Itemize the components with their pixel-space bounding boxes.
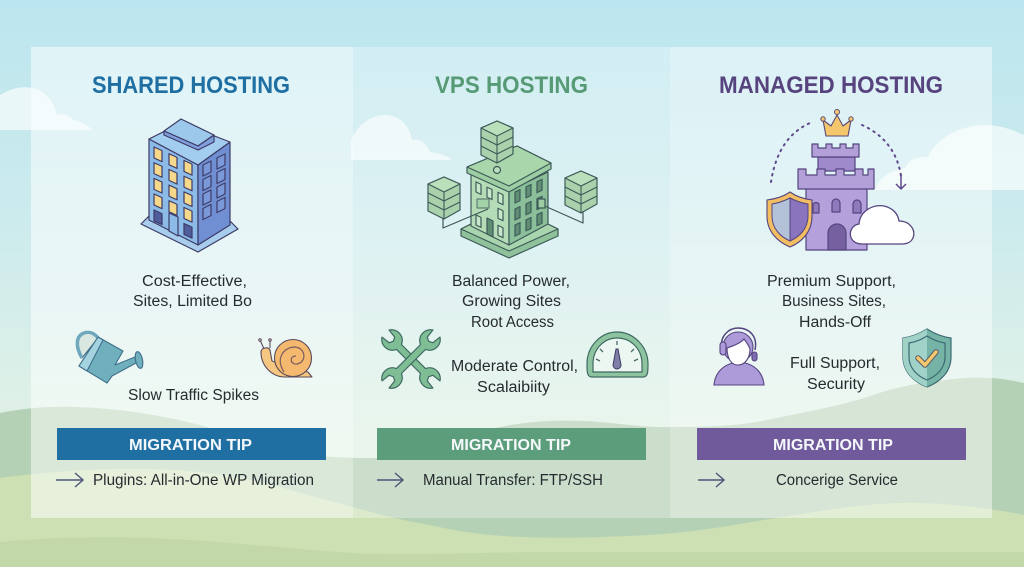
text: VPS tip: Manual Transfer: FTP/SSH <box>423 472 603 489</box>
text: shared summary: Sites, Limited Bo <box>133 293 252 310</box>
icon: apartment building <box>141 119 238 252</box>
text: shared summary <box>133 273 252 310</box>
panel: shared hosting <box>31 47 353 518</box>
arrow: shared tip <box>56 473 83 487</box>
text: managed summary <box>767 273 896 331</box>
icon: security shield <box>903 329 951 387</box>
background hills <box>0 378 1024 567</box>
arrow: VPS tip <box>377 473 403 487</box>
banner: managed migration tip <box>697 428 966 460</box>
banner: shared migration tip <box>57 428 326 460</box>
icon: speed gauge <box>587 332 648 377</box>
panel: VPS hosting <box>353 47 670 518</box>
icon: support agent <box>714 328 764 385</box>
text: VPS summary: Balanced Power, <box>452 273 570 290</box>
heading: shared hosting: SHARED HOSTING <box>92 72 290 99</box>
banner: shared migration tip: MIGRATION TIP <box>129 437 252 454</box>
text: shared tip: Plugins: All-in-One WP Migration <box>93 472 314 489</box>
text: VPS control <box>451 358 578 396</box>
text: VPS summary <box>452 273 570 331</box>
text: VPS summary: Root Access <box>471 314 554 331</box>
text: VPS control: Moderate Control, <box>451 358 578 375</box>
arrow: managed tip <box>698 473 724 487</box>
text: managed summary: Hands-Off <box>799 314 872 331</box>
text: managed summary: Premium Support, <box>767 273 896 290</box>
icon: building with servers <box>428 121 597 258</box>
text: shared drawback: Slow Traffic Spikes <box>128 387 259 404</box>
text: managed features: Security <box>807 376 865 393</box>
text: managed features <box>790 355 880 393</box>
text: VPS summary: Growing Sites <box>462 293 561 310</box>
icon: crossed wrenches <box>378 326 444 392</box>
heading: managed hosting: MANAGED HOSTING <box>719 72 943 99</box>
text: shared summary: Cost-Effective, <box>142 273 247 290</box>
banner: VPS migration tip <box>377 428 646 460</box>
icon: castle with crown and shield <box>767 110 914 250</box>
heading: VPS hosting: VPS HOSTING <box>435 72 588 99</box>
text: managed tip: Concerige Service <box>776 472 898 489</box>
text: managed features: Full Support, <box>790 355 880 372</box>
text: VPS control: Scalaibiity <box>477 379 550 396</box>
icon: snail <box>259 339 312 377</box>
text: managed summary: Business Sites, <box>782 293 886 310</box>
banner: VPS migration tip: MIGRATION TIP <box>451 437 571 454</box>
banner: managed migration tip: MIGRATION TIP <box>773 437 893 454</box>
background clouds <box>0 87 1024 190</box>
panel: managed hosting <box>670 47 992 518</box>
icon: watering can <box>77 332 144 383</box>
